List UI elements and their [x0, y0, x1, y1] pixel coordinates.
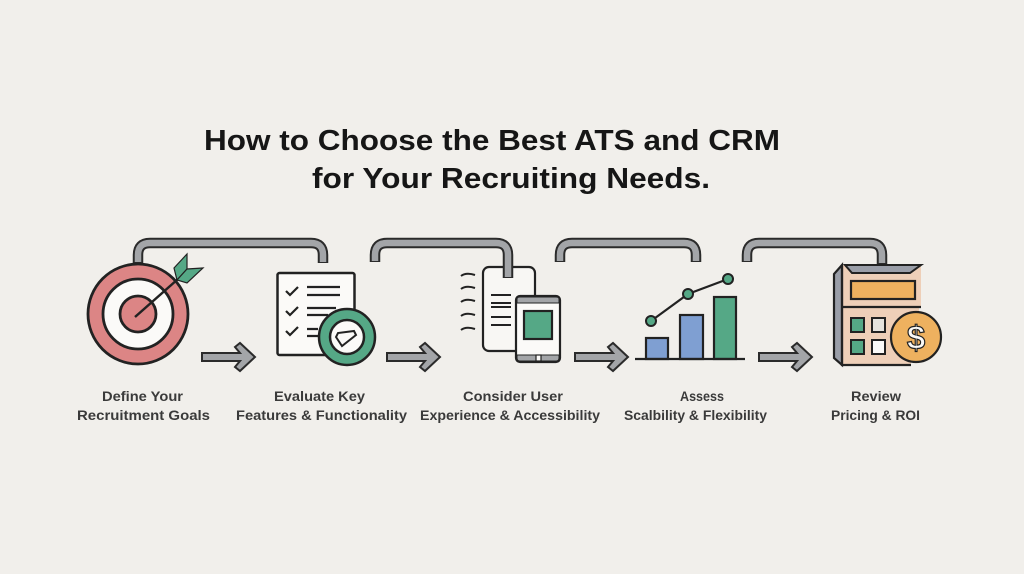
icon: checklist with badge: [278, 273, 375, 365]
icon: calculator with dollar coin: $: [907, 319, 925, 356]
title: How to Choose the Best ATS and CRM: [204, 125, 780, 157]
label: define your recruitment goals: [77, 389, 210, 423]
label: evaluate key features: [236, 389, 408, 423]
connector: experience to scalability: [560, 243, 696, 262]
title: [204, 125, 780, 195]
label: review pricing: Pricing & ROI: [831, 408, 920, 423]
label: assess scalability: [624, 389, 768, 423]
arrow: step 4 to 5: [759, 343, 812, 371]
connector: goals to features: [138, 243, 323, 263]
label: evaluate key features: Features & Functionality: [236, 408, 408, 423]
arrow: step 3 to 4: [575, 343, 628, 371]
label: assess scalability: Scalbility & Flexibility: [624, 408, 768, 423]
arrow: step 1 to 2: [202, 343, 255, 371]
label: review pricing: Review: [851, 389, 902, 404]
icon: target with arrow: [88, 254, 203, 364]
label: define your recruitment goals: Define Your: [102, 389, 184, 404]
icon: document and tablet: [461, 267, 560, 362]
title: for Your Recruiting Needs.: [312, 163, 710, 195]
label: consider user experience: [420, 389, 601, 423]
label: consider user experience: Experience & Accessibility: [420, 408, 601, 423]
icon: growth bar chart: [635, 274, 745, 359]
label: review pricing: [831, 389, 920, 423]
label: consider user experience: Consider User: [463, 389, 564, 404]
connector: scalability to pricing: [747, 243, 882, 264]
label: assess scalability: Assess: [680, 389, 724, 404]
label: evaluate key features: Evaluate Key: [274, 389, 366, 404]
label: define your recruitment goals: Recruitment Goals: [77, 408, 210, 423]
arrow: step 2 to 3: [387, 343, 440, 371]
connector: features to experience: [375, 243, 508, 278]
icon: calculator with dollar coin: [834, 265, 941, 365]
